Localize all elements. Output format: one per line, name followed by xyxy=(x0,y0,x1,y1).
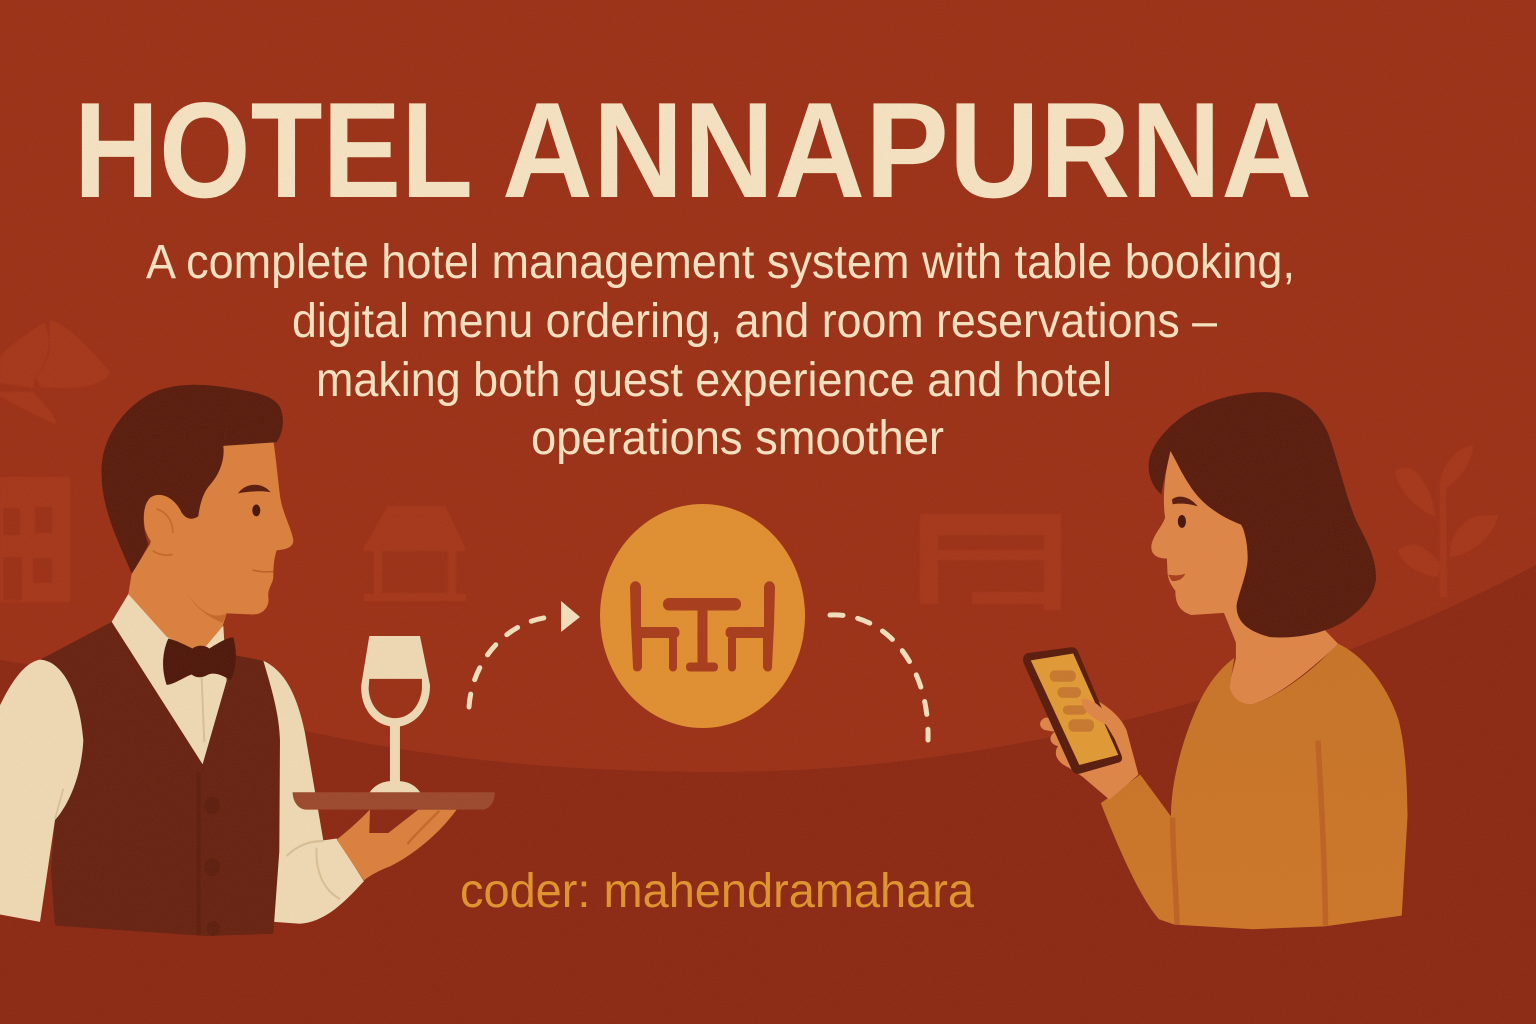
phone fingers xyxy=(1040,698,1138,800)
ear xyxy=(144,495,182,552)
background silhouettes xyxy=(0,320,1498,610)
credit line: coder: mahendramahara xyxy=(460,865,974,918)
phone screen xyxy=(1031,654,1118,765)
silhouette: bed xyxy=(920,514,1061,610)
lips xyxy=(1168,574,1185,581)
table and chairs icon xyxy=(630,581,775,672)
eye xyxy=(1178,515,1186,528)
mouth line xyxy=(253,570,273,572)
ear creases xyxy=(153,509,173,555)
hair xyxy=(1149,392,1376,637)
subtitle: making both guest experience and hotel xyxy=(316,354,1112,407)
eyebrow xyxy=(1172,497,1198,506)
guest figure xyxy=(1023,392,1408,929)
subtitle: operations smoother xyxy=(531,412,944,465)
cuff creases xyxy=(287,841,340,899)
subtitle: A complete hotel management system with table booking, xyxy=(146,236,1295,289)
subtitle xyxy=(146,236,1295,465)
guest head and neck xyxy=(1151,450,1338,704)
tray xyxy=(293,792,495,810)
thumb xyxy=(1081,699,1118,744)
silhouette: plant xyxy=(1395,445,1498,597)
menu items xyxy=(1050,670,1094,732)
left sleeve xyxy=(0,660,83,922)
table icon circle xyxy=(600,504,805,728)
eyebrow xyxy=(238,485,271,493)
sweater body xyxy=(1101,644,1408,929)
waiter figure xyxy=(0,385,495,936)
bow tie xyxy=(163,637,236,685)
hair xyxy=(102,385,283,574)
right sleeve xyxy=(263,661,364,924)
waiter head and neck xyxy=(128,440,293,655)
title: HOTEL xyxy=(74,74,473,226)
silhouette: tree xyxy=(0,320,111,425)
finger shadow xyxy=(407,811,439,844)
jaw shadow xyxy=(188,595,227,623)
title xyxy=(74,74,1312,226)
sweater folds xyxy=(1173,741,1325,926)
vest seam and buttons xyxy=(197,772,220,936)
vest xyxy=(40,622,280,936)
hand xyxy=(337,810,457,880)
shirt placket xyxy=(202,677,204,742)
path: dashed arrow left xyxy=(469,601,580,707)
subtitle: digital menu ordering, and room reservations – xyxy=(292,295,1217,348)
phone xyxy=(1023,647,1122,774)
path: dashed arc right xyxy=(830,615,928,740)
silhouette: building xyxy=(0,477,70,602)
wine glass xyxy=(361,636,430,793)
title: ANNAPURNA xyxy=(502,74,1312,226)
shirt front xyxy=(112,594,227,764)
eye xyxy=(252,504,260,516)
silhouette: pavilion xyxy=(364,506,466,601)
sleeve fold xyxy=(55,789,63,819)
